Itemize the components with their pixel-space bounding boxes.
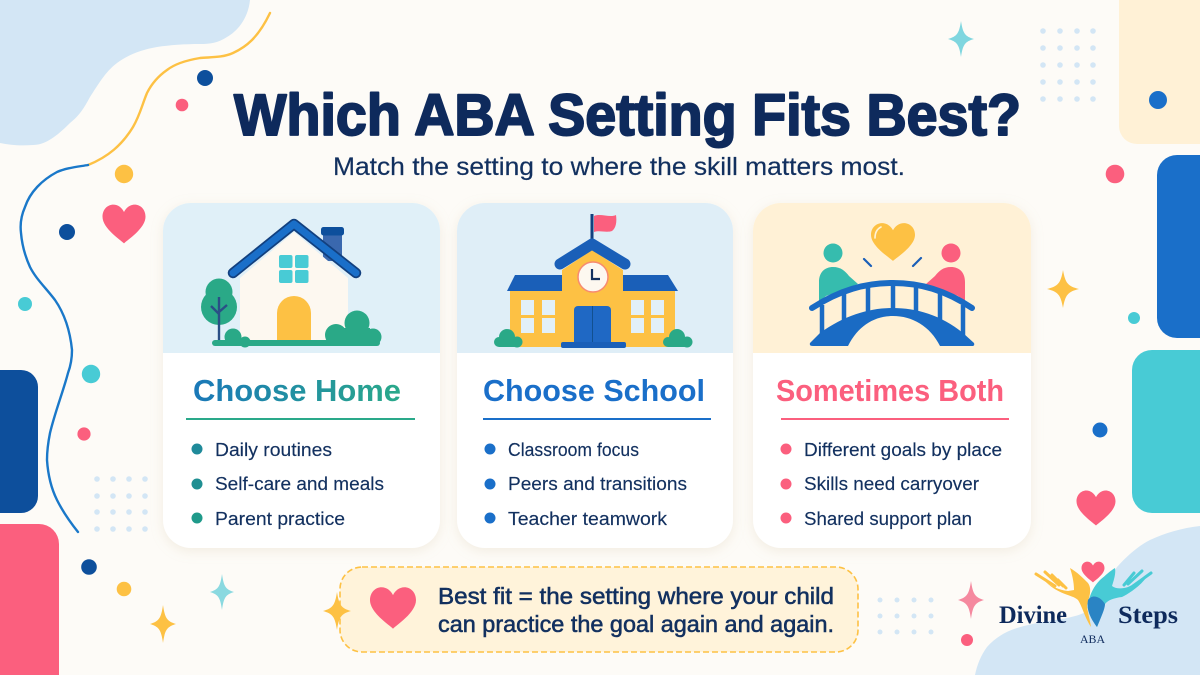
list: both [780,439,1002,529]
icon: sparkle teal bottom [210,574,234,610]
icon: logo heart [1082,562,1104,582]
subtitle: Match the setting to where the skill matters most. [333,153,905,181]
heading: choose school: Choose School [483,373,705,408]
list: home: Daily routines [215,439,332,460]
logo: Divine Steps ABA [999,562,1178,646]
list: school: Classroom focus [508,439,639,460]
callout text [438,583,834,637]
logo text: Divine [999,602,1067,629]
callout [323,567,858,652]
list: home: Self-care and meals [215,473,384,494]
icon: sparkle yellow bottom left [150,605,176,643]
icon: heart top left [102,205,146,243]
panel: home [163,203,440,548]
logo text [999,602,1178,646]
decorative blob: bottom right [975,526,1200,675]
callout text: Best fit = the setting where your child [438,583,834,609]
icon: heart right [1076,490,1116,526]
logo text: Steps [1118,602,1178,629]
list: both: Skills need carryover [804,473,979,494]
icon: bridge with people [810,223,974,346]
heading: choose home: Choose Home [193,373,401,408]
panel: both [753,203,1031,548]
list: home [192,439,384,529]
icon: house [201,224,382,348]
panel image background: both [753,203,1031,353]
heading: sometimes both: Sometimes Both [776,373,1004,408]
list: school: Peers and transitions [508,473,687,494]
list: both: Shared support plan [804,508,972,529]
decorative curve: yellow [88,13,270,165]
callout text: can practice the goal again and again. [438,611,834,637]
icon: callout sparkle [323,592,351,630]
title: Which ABA Setting Fits Best? [234,83,1021,148]
decorative curve: blue [21,165,88,532]
list: home: Parent practice [215,508,345,529]
list: both: Different goals by place [804,439,1002,460]
logo text: ABA [1080,632,1105,646]
list: school: Teacher teamwork [508,508,668,529]
icon: sparkle teal top [948,21,974,57]
icon: sparkle pink [958,581,984,619]
decorative blob: top left [0,0,250,145]
dot grids [94,28,1096,634]
panel image background: school [457,203,733,353]
icon: school [494,214,692,348]
panel image background: home [163,203,440,353]
panel: school [457,203,733,548]
icon: sparkle yellow right [1047,270,1079,308]
icon: logo hands [1036,568,1151,627]
list: school [484,439,687,529]
icon: callout heart [370,587,416,629]
